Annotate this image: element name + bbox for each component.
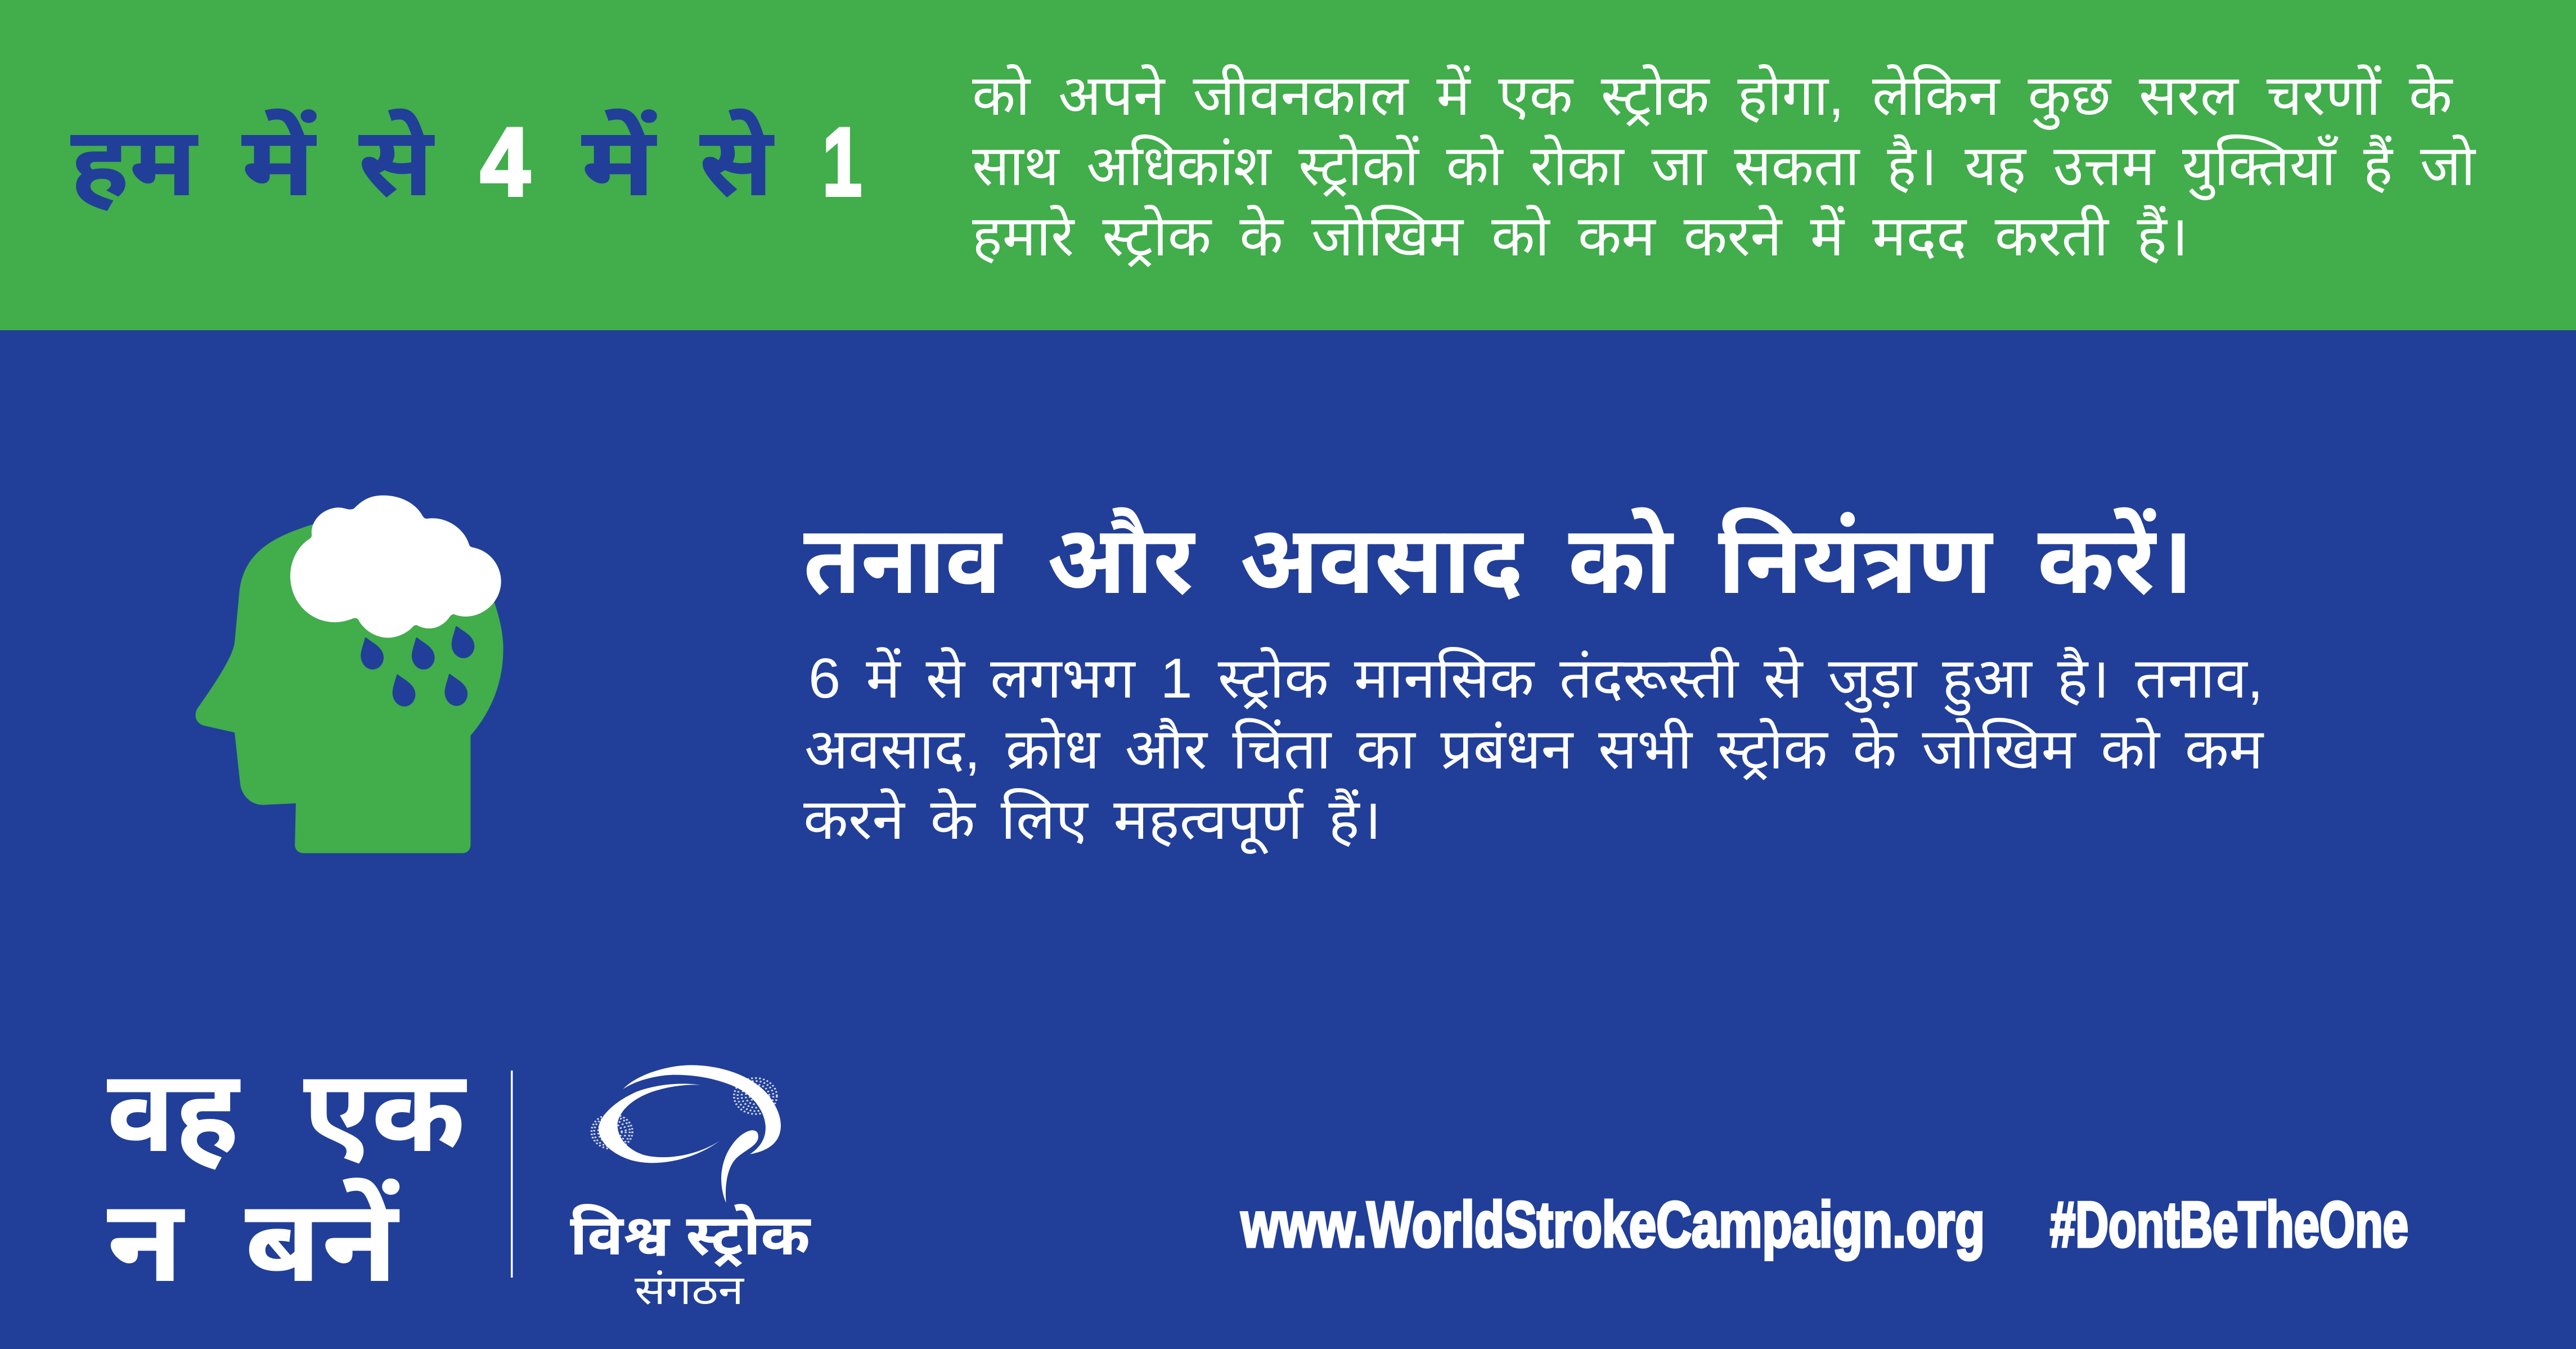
icon: green head with rain cloud xyxy=(196,496,503,853)
footer website URL: www.WorldStrokeCampaign.org xyxy=(1240,1189,1985,1261)
heading: 1 in 4 of us: 4 xyxy=(480,108,530,216)
logo sub-wordmark: संगठन xyxy=(635,1268,744,1313)
text block: header statement: साथ अधिकांश स्ट्रोकों को रोका जा सकता है। यह उत्तम युक्तियाँ हैं जो xyxy=(972,134,2476,201)
heading: 1 in 4 of us: से xyxy=(699,108,775,216)
logo mark: brain swoosh xyxy=(591,1065,781,1203)
cloud xyxy=(290,496,501,638)
panel: green header band xyxy=(0,0,2576,330)
text block: body copy: करने के लिए महत्वपूर्ण हैं। xyxy=(803,788,1382,855)
text block: header statement: को अपने जीवनकाल में एक स्ट्रोक होगा, लेकिन कुछ सरल चरणों के xyxy=(972,64,2453,131)
heading: 1 in 4 of us xyxy=(70,108,862,216)
heading: 1 in 4 of us: हम xyxy=(70,108,199,216)
text block: body copy: अवसाद, क्रोध और चिंता का प्रबंधन सभी स्ट्रोक के जोखिम को कम xyxy=(804,718,2264,781)
heading: 1 in 4 of us: में xyxy=(581,108,657,216)
head silhouette xyxy=(196,524,503,853)
text block: header statement xyxy=(972,64,2476,268)
slogan: don't be the one: वह एक xyxy=(107,1047,467,1176)
heading: 1 in 4 of us: 1 xyxy=(822,108,862,216)
slogan: don't be the one: न बनें xyxy=(107,1177,400,1306)
text block: header statement: हमारे स्ट्रोक के जोखिम को कम करने में मदद करती हैं। xyxy=(972,205,2188,268)
slogan: don't be the one xyxy=(107,1047,467,1306)
text block: body copy xyxy=(803,647,2264,855)
text block: body copy: 6 में से लगभग 1 स्ट्रोक मानसिक तंदरूस्ती से जुड़ा हुआ है। तनाव, xyxy=(808,647,2263,716)
logo: World Stroke Organization xyxy=(570,1065,811,1313)
heading: 1 in 4 of us: से xyxy=(358,108,435,216)
rain drops xyxy=(361,626,474,707)
logo wordmark: विश्व स्ट्रोक xyxy=(570,1204,811,1267)
footer hashtag: #DontBeTheOne xyxy=(2050,1189,2408,1261)
heading: control stress and depression: तनाव और अवसाद को नियंत्रण करें। xyxy=(803,507,2193,614)
divider line xyxy=(511,1071,513,1278)
heading: 1 in 4 of us: में xyxy=(241,108,317,216)
